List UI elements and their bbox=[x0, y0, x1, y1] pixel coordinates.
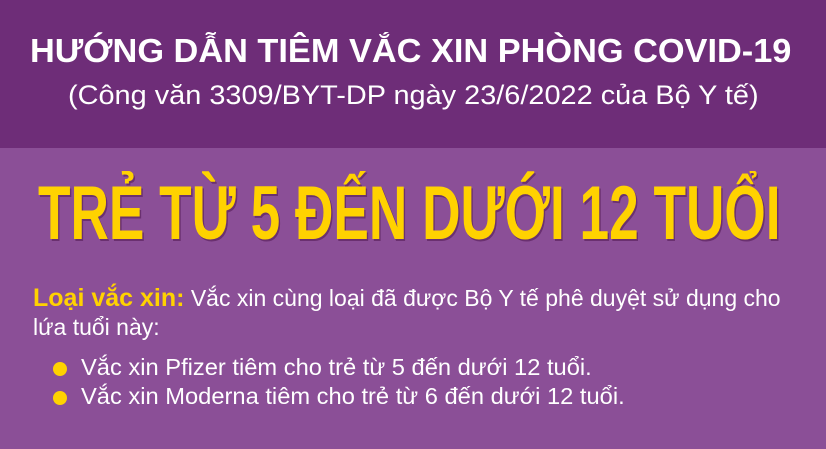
header title: HƯỚNG DẪN TIÊM VẮC XIN PHÒNG COVID-19 bbox=[30, 32, 791, 69]
main title: TRẺ TỪ 5 ĐẾN DƯỚI 12 TUỔI bbox=[38, 171, 781, 256]
text block: vaccine type: lứa tuổi này: bbox=[33, 314, 160, 340]
bullet: Moderna: Vắc xin Moderna tiêm cho trẻ từ 6 đến dưới 12 tuổi. bbox=[81, 383, 625, 409]
text block: vaccine type bbox=[33, 284, 781, 409]
header band bbox=[0, 0, 826, 148]
bullet: Pfizer: Vắc xin Pfizer tiêm cho trẻ từ 5 đến dưới 12 tuổi. bbox=[81, 354, 592, 380]
header subtitle: (Công văn 3309/BYT-DP ngày 23/6/2022 của Bộ Y tế) bbox=[68, 80, 759, 110]
intro paragraph: Loại vắc xin: Vắc xin cùng loại đã được Bộ Y tế phê duyệt sử dụng cho bbox=[33, 284, 781, 312]
bullet list bbox=[53, 354, 625, 409]
